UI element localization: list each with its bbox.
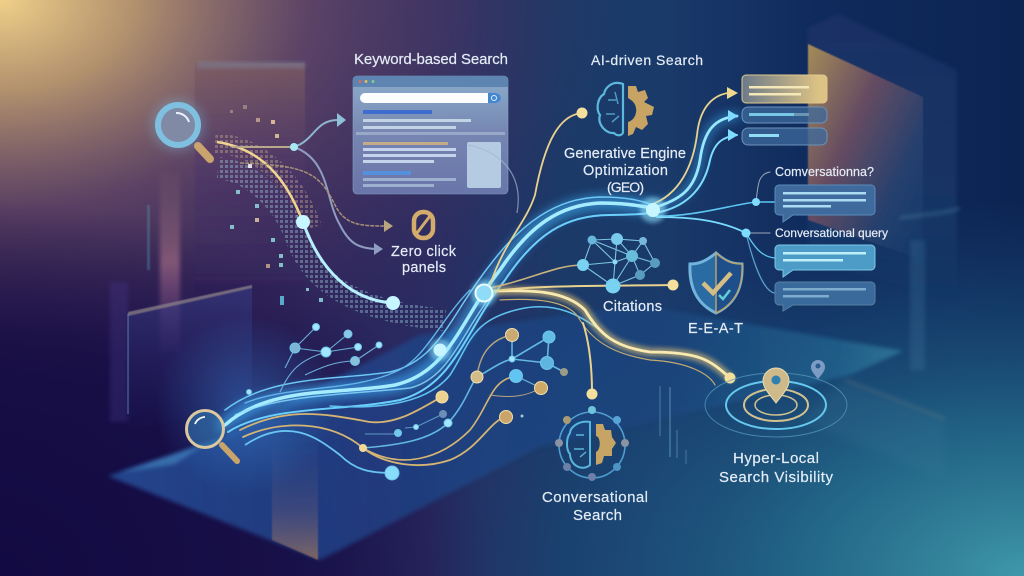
icon: conversational search brain <box>555 406 629 481</box>
flow: keyword paths <box>217 113 518 310</box>
chat: third bubble <box>775 282 875 311</box>
icon: location rings and pins <box>705 360 847 437</box>
label: hyper-local search visibility <box>719 450 834 486</box>
panels: answer cards <box>742 75 827 145</box>
label: citations: Citations <box>603 299 662 315</box>
chat: conversationna: Comversationna? <box>775 165 874 179</box>
label: conversational search: Search <box>573 507 622 524</box>
icon: EEAT shield <box>690 253 742 313</box>
chat: conversationna <box>775 165 875 222</box>
label: generative engine optimization: (GEO) <box>607 179 644 195</box>
icon: zero click <box>414 212 433 238</box>
label: hyper-local search visibility: Search Visibility <box>719 469 834 486</box>
chat: conversational query <box>775 226 888 277</box>
network: citations <box>577 233 660 294</box>
icon: magnifier bottom <box>186 410 237 461</box>
heading: AI-driven search: AI-driven Search <box>591 52 703 68</box>
flow: gold paths <box>240 87 738 465</box>
chat: conversational query: Conversational query <box>775 226 888 240</box>
label: generative engine optimization <box>564 146 686 195</box>
background panels <box>108 14 960 560</box>
icon: magnifier top <box>151 98 210 159</box>
panel: search results browser <box>353 76 508 194</box>
icon: brain and gear <box>598 83 654 136</box>
data trail: pixel dots <box>215 105 445 320</box>
label: conversational search: Conversational <box>542 489 648 506</box>
label: generative engine optimization: Optimization <box>583 163 668 179</box>
label: conversational search <box>542 489 648 524</box>
label: zero click panels <box>391 244 457 276</box>
label: generative engine optimization: Generative Engine <box>564 146 686 162</box>
label: zero click panels: Zero click <box>391 244 457 260</box>
heading: keyword-based search: Keyword-based Search <box>354 51 508 68</box>
network: lower-left nodes <box>245 327 564 473</box>
label: EEAT: E-E-A-T <box>688 321 743 337</box>
label: zero click panels: panels <box>402 260 446 276</box>
nodes: flow points <box>246 108 760 480</box>
flow: main AI stream glow <box>225 110 775 432</box>
label: hyper-local search visibility: Hyper-Local <box>733 450 819 467</box>
